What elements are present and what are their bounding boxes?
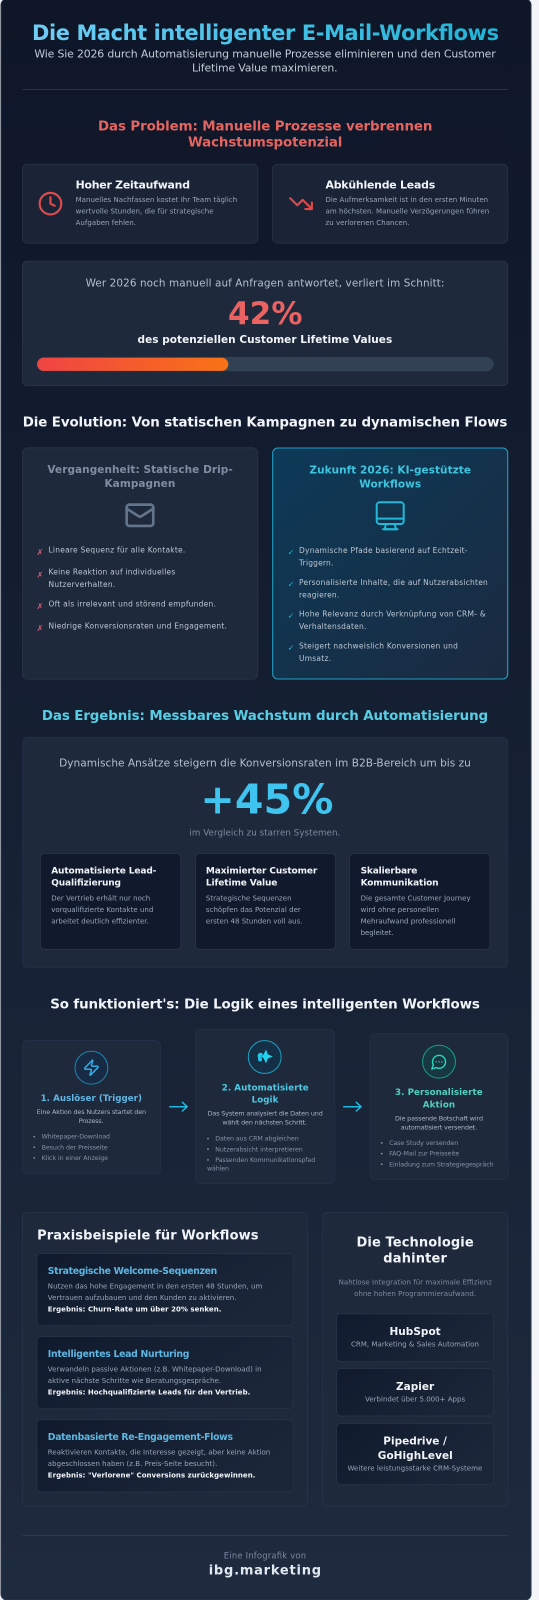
list: trigger [33, 1134, 110, 1162]
card: welcome-sequenzen [37, 1254, 293, 1326]
panel: zukunft 2026 [273, 448, 508, 679]
list: nachteile: ✗ [37, 570, 43, 579]
panel: schritt 3 [370, 1034, 508, 1180]
list: nachteile: Oft als irrelevant und störend empfunden. [48, 599, 216, 608]
card: zapier [337, 1368, 494, 1416]
panel: technologie: Nahtlose Integration für maximale Effizienz [339, 1278, 492, 1286]
title: Die Macht intelligenter E-Mail-Workflows [32, 21, 499, 45]
arrow: schritt 1 zu 2 [170, 1102, 187, 1111]
panel: zukunft 2026: Workflows [359, 479, 421, 491]
panel: schritt 1: Eine Aktion des Nutzers startet den [37, 1108, 146, 1116]
progress bar [37, 357, 494, 371]
card: lead nurturing: aktive nächste Schritte wie Beratungsgespräche. [48, 1377, 221, 1385]
list: logik: Passenden Kommunikationspfad [215, 1157, 315, 1164]
panel: schritt 3: automatisiert versendet. [401, 1123, 477, 1131]
panel: schritt 3: Die passende Botschaft wird [395, 1114, 483, 1122]
card: skalierbare kommunikation: Skalierbare [361, 866, 417, 876]
card: skalierbare kommunikation: wird ohne personellen [361, 906, 439, 914]
panel: hoher zeitaufwand: wertvolle Stunden, die für strategische [76, 208, 213, 216]
footer [209, 1551, 321, 1579]
icon: message [423, 1045, 455, 1078]
card: hubspot: HubSpot [390, 1326, 441, 1338]
list: aktion: Einladung zum Strategiegespräch [389, 1161, 494, 1168]
icon: monitor [377, 502, 404, 529]
heading: die evolution: Die Evolution: Von statischen Kampagnen zu dynamischen Flows [23, 416, 507, 431]
list: vorteile [288, 546, 488, 663]
card: re-engagement: abgeschlossen haben (z.B. Preis-Seite besucht). [48, 1460, 217, 1468]
panel: schritt 2 [196, 1029, 335, 1184]
panel: hoher zeitaufwand: Manuelles Nachfassen kostet Ihr Team täglich [76, 196, 237, 204]
card: lead nurturing: Verwandeln passive Aktionen (z.B. Whitepaper-Download) in [48, 1365, 262, 1373]
list: vorteile: Personalisierte Inhalte, die auf Nutzerabsichten [299, 578, 488, 587]
panel: technologie [323, 1212, 508, 1506]
panel: abkühlende leads: am höchsten. Manuelle Verzögerungen führen [326, 208, 489, 216]
panel: technologie: ohne hohen Programmieraufwand. [354, 1290, 476, 1298]
panel: 42 percent statistic [22, 261, 508, 386]
list: nachteile: Niedrige Konversionsraten und Engagement. [48, 622, 227, 631]
list: nachteile: Keine Reaktion auf individuelles [48, 568, 175, 577]
subtitle: Wie Sie 2026 durch Automatisierung manuelle Prozesse eliminieren und den Customer [34, 48, 496, 60]
list: logik: Nutzerabsicht interpretieren [215, 1146, 303, 1153]
card: zapier: Verbindet über 5.000+ Apps [365, 1395, 465, 1403]
footer: Eine Infografik von [224, 1551, 306, 1561]
list: nachteile: ✗ [37, 602, 43, 611]
list: vorteile: reagieren. [299, 590, 339, 599]
header [32, 21, 499, 74]
panel: abkühlende leads [272, 164, 508, 243]
card: lead-qualifizierung: vorqualifizierte Kontakte und [51, 906, 153, 914]
list: vorteile: Dynamische Pfade basierend auf Echtzeit- [299, 546, 468, 555]
card: pipedrive: GoHighLevel [378, 1450, 453, 1462]
icon: lightning [75, 1051, 108, 1084]
panel: technologie: dahinter [383, 1251, 447, 1266]
heading: das problem: Wachstumspotenzial [188, 136, 342, 150]
list: nachteile: ✗ [37, 548, 43, 557]
card: skalierbare kommunikation [350, 854, 490, 949]
panel: abkühlende leads: zu verlorenen Chancen. [326, 219, 409, 227]
list: nachteile [37, 546, 227, 633]
card: skalierbare kommunikation: Mehraufwand professionell [361, 917, 456, 925]
card: lead-qualifizierung: Der Vertrieb erhält nur noch [51, 894, 150, 902]
panel: schritt 3: 3. Personalisierte [395, 1088, 483, 1098]
list: aktion: Case Study versenden [389, 1140, 458, 1147]
panel: ergebnis: im Vergleich zu starren Systemen. [189, 829, 340, 839]
list: vorteile: ✓ [288, 548, 294, 557]
card: lead nurturing [37, 1336, 293, 1409]
icon: clock [40, 193, 61, 214]
card: lead-qualifizierung: arbeitet deutlich effizienter. [51, 917, 149, 925]
card: customer lifetime value: ersten 48 Stunden voll aus. [206, 917, 302, 925]
card: hubspot: CRM, Marketing & Sales Automation [351, 1341, 479, 1349]
card: lead-qualifizierung: Automatisierte Lead- [51, 866, 157, 876]
card: pipedrive: Weitere leistungsstarke CRM-Systeme [348, 1464, 482, 1472]
panel: ergebnis [22, 737, 508, 968]
card: pipedrive: Pipedrive / [383, 1436, 447, 1448]
panel: technologie: Die Technologie [356, 1235, 474, 1250]
card: skalierbare kommunikation: begleitet. [361, 929, 394, 937]
card: welcome-sequenzen: Strategische Welcome-Sequenzen [48, 1266, 217, 1277]
list: vorteile: Umsatz. [299, 654, 331, 663]
list: logik [207, 1136, 315, 1173]
card: hubspot [337, 1314, 494, 1361]
panel: schritt 2: 2. Automatisierte [222, 1083, 309, 1093]
list: nachteile: Lineare Sequenz für alle Kontakte. [48, 546, 185, 555]
list: trigger: Besuch der Preisseite [42, 1144, 108, 1151]
icon: mail [127, 505, 153, 526]
panel: 42 percent statistic: des potenziellen Customer Lifetime Values [138, 334, 392, 346]
card: customer lifetime value: Strategische Sequenzen [206, 894, 292, 902]
panel: abkühlende leads: Die Aufmerksamkeit ist in den ersten Minuten [326, 196, 488, 204]
list: trigger: Klick in einer Anzeige [42, 1155, 108, 1162]
card: customer lifetime value: schöpfen das Potenzial der [206, 906, 301, 914]
card: customer lifetime value: Maximierter Customer [206, 866, 318, 876]
card: re-engagement: Reaktivieren Kontakte, die Interesse gezeigt, aber keine Aktion [48, 1448, 270, 1456]
panel: praxisbeispiele [22, 1212, 308, 1506]
heading: so funktioniert's: So funktioniert's: Die Logik eines intelligenten Workflows [50, 997, 480, 1012]
panel: schritt 2: wählt den nächsten Schritt. [222, 1119, 307, 1127]
panel: schritt 1: 1. Auslöser (Trigger) [41, 1094, 142, 1104]
panel: hoher zeitaufwand: Hoher Zeitaufwand [76, 179, 190, 192]
list: aktion: FAQ-Mail zur Preisseite [389, 1151, 459, 1158]
card: customer lifetime value: Lifetime Value [206, 879, 277, 889]
panel: schritt 3: Aktion [423, 1100, 455, 1110]
list: vorteile: Verhaltensdaten. [299, 622, 366, 631]
panel: hoher zeitaufwand: Aufgaben fehlen. [76, 219, 136, 227]
card: re-engagement [37, 1420, 293, 1492]
panel: vergangenheit: Kampagnen [104, 478, 175, 490]
panel: schritt 2: Das System analysiert die Daten und [208, 1110, 323, 1118]
card: customer lifetime value [196, 854, 336, 949]
icon: logic spark [248, 1041, 281, 1073]
subtitle [34, 48, 496, 74]
heading: das ergebnis: Das Ergebnis: Messbares Wachstum durch Automatisierung [42, 709, 488, 724]
subtitle: Lifetime Value maximieren. [192, 62, 338, 74]
list: vorteile: Steigert nachweislich Konversionen und [299, 642, 458, 651]
heading: das problem: Das Problem: Manuelle Prozesse verbrennen [98, 120, 432, 134]
list: trigger: Whitepaper-Download [42, 1134, 110, 1141]
panel: vergangenheit: Vergangenheit: Statische Drip- [47, 464, 233, 476]
list: vorteile: ✓ [288, 580, 294, 589]
card: zapier: Zapier [396, 1381, 435, 1393]
card: pipedrive [337, 1424, 494, 1485]
card: welcome-sequenzen: Nutzen das hohe Engagement in den ersten 48 Stunden, um [48, 1282, 262, 1290]
card: lead-qualifizierung [40, 854, 181, 949]
list: vorteile: Hohe Relevanz durch Verknüpfung von CRM- & [299, 610, 486, 619]
panel: schritt 1 [22, 1040, 160, 1174]
card: lead-qualifizierung: Qualifizierung [51, 879, 121, 889]
list: nachteile: ✗ [37, 624, 43, 633]
card: welcome-sequenzen: Ergebnis: Churn-Rate um über 20% senken. [48, 1305, 221, 1313]
list: vorteile: Triggern. [298, 558, 333, 567]
list: vorteile: ✓ [288, 643, 294, 652]
panel: schritt 1: Prozess. [79, 1117, 104, 1125]
panel: vergangenheit [22, 448, 258, 679]
card: welcome-sequenzen: Vertrauen aufzubauen und den Kunden zu aktivieren. [48, 1294, 236, 1302]
footer: ibg.marketing [209, 1564, 321, 1579]
icon: trending down [290, 198, 312, 209]
panel: ergebnis: Dynamische Ansätze steigern die Konversionsraten im B2B-Bereich um bis zu [59, 757, 471, 769]
panel: abkühlende leads: Abkühlende Leads [326, 179, 435, 192]
list: logik: wählen [207, 1166, 229, 1173]
card: skalierbare kommunikation: Die gesamte Customer Journey [361, 894, 471, 902]
list: logik: Daten aus CRM abgleichen [215, 1136, 299, 1143]
big number: 42%: 42% [228, 296, 302, 332]
big number: +45%: +45% [200, 775, 333, 823]
panel: 42 percent statistic: Wer 2026 noch manuell auf Anfragen antwortet, verliert im Schnitt: [86, 277, 444, 289]
card: lead nurturing: Ergebnis: Hochqualifizierte Leads für den Vertrieb. [48, 1388, 250, 1396]
panel: zukunft 2026: Zukunft 2026: KI-gestützte [309, 464, 471, 476]
card: skalierbare kommunikation: Kommunikation [361, 879, 439, 889]
panel: hoher zeitaufwand [22, 164, 258, 243]
panel: schritt 2: Logik [252, 1096, 279, 1106]
card: re-engagement: Ergebnis: "Verlorene" Conversions zurückgewinnen. [48, 1471, 255, 1479]
card: lead nurturing: Intelligentes Lead Nurturing [48, 1349, 189, 1360]
card: re-engagement: Datenbasierte Re-Engagement-Flows [48, 1432, 233, 1443]
list: aktion [381, 1140, 494, 1168]
heading: das problem [98, 120, 432, 150]
list: vorteile: ✓ [288, 612, 294, 621]
arrow: schritt 2 zu 3 [344, 1102, 361, 1111]
panel: praxisbeispiele: Praxisbeispiele für Workflows [37, 1228, 259, 1243]
list: nachteile: Nutzerverhalten. [48, 580, 115, 589]
